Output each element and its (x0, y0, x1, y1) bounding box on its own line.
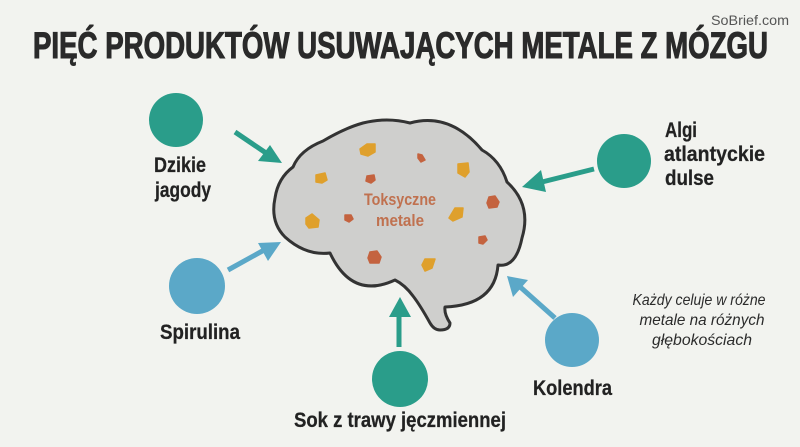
side note: Każdy celuje w różne (632, 292, 766, 309)
label (664, 119, 765, 190)
arrow to brain (389, 297, 411, 347)
icon: teal circle (372, 351, 428, 407)
label: Sok z trawy jęczmiennej (294, 409, 506, 432)
side note (632, 292, 766, 349)
arrow to brain (507, 276, 555, 318)
brain label (364, 190, 436, 230)
item: Sok z trawy jęczmiennej (294, 297, 506, 432)
label: Algi (665, 119, 697, 142)
brain outline (274, 120, 525, 330)
label: Kolendra (533, 377, 612, 400)
watermark: SoBrief.com (711, 12, 789, 28)
brain label: Toksyczne (364, 190, 436, 209)
metal particles (306, 144, 499, 271)
label: Spirulina (160, 321, 240, 344)
item: Spirulina (160, 242, 281, 344)
label: dulse (665, 167, 714, 190)
icon: blue circle (169, 258, 225, 314)
item: Dzikie jagody (149, 93, 282, 202)
icon: blue circle (545, 313, 599, 367)
brain (274, 120, 525, 330)
label: atlantyckie (664, 143, 765, 166)
brain label: metale (376, 211, 424, 230)
arrow to brain (228, 242, 281, 270)
arrow to brain (522, 169, 594, 192)
side note: metale na różnych (640, 312, 765, 329)
label: jagody (154, 179, 211, 202)
label: Dzikie (154, 154, 206, 177)
side note: głębokościach (652, 332, 752, 349)
item: Algi atlantyckie dulse (522, 119, 765, 192)
icon: teal circle (149, 93, 203, 147)
icon: teal circle (597, 134, 651, 188)
item: Kolendra (507, 276, 612, 400)
label (154, 154, 211, 202)
arrow to brain (235, 132, 282, 163)
